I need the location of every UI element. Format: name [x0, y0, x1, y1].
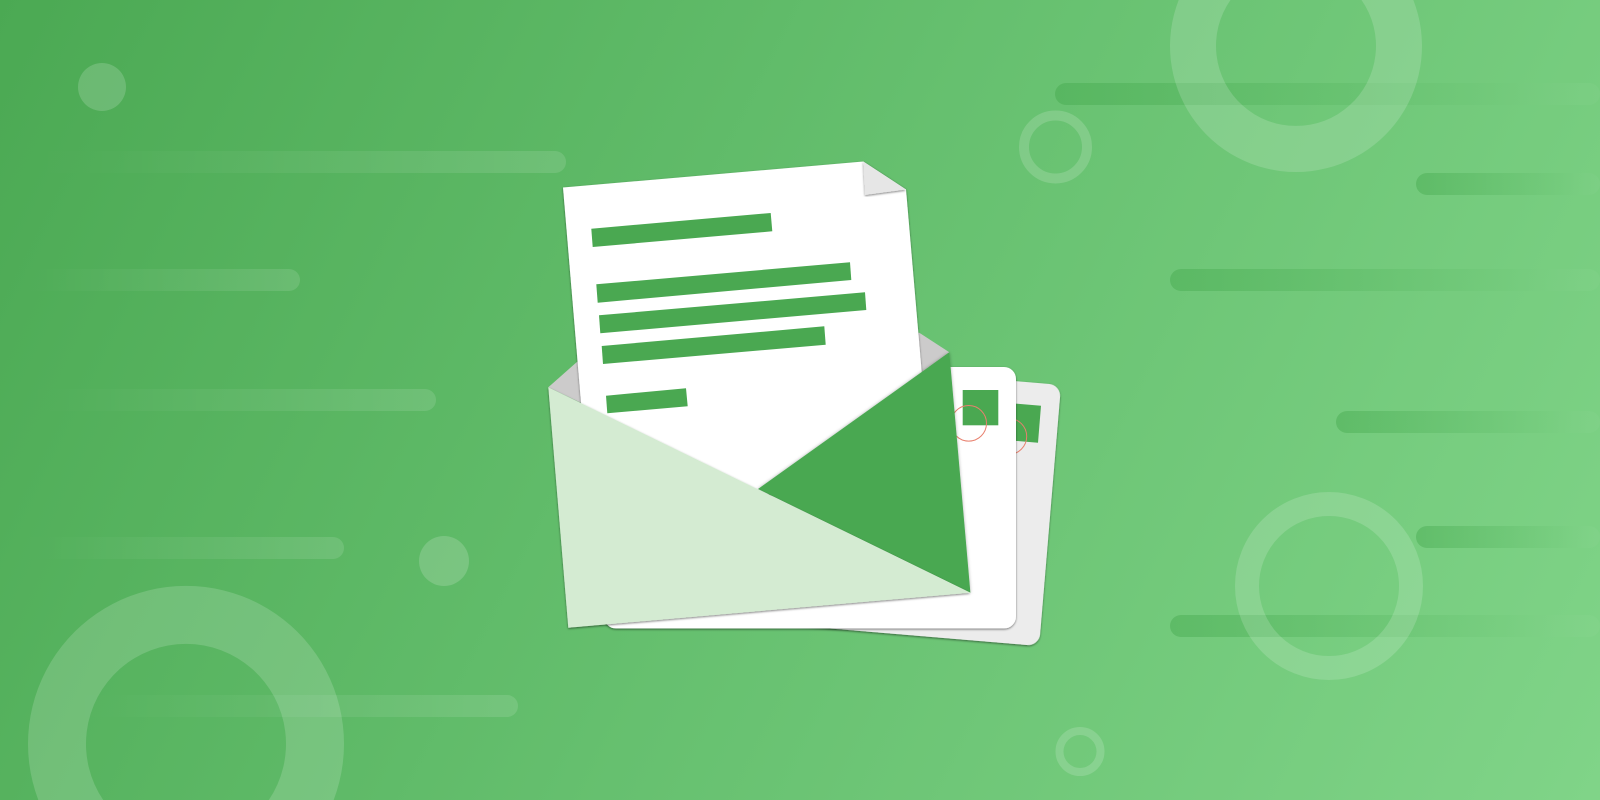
- postmark circle on front card: [951, 406, 986, 441]
- envelope back flap: [548, 333, 949, 489]
- letter text lines: [591, 213, 866, 413]
- illustration: envelope with letters: [548, 162, 1061, 646]
- letter sheet: [563, 162, 931, 510]
- envelope front flap (light green): [548, 387, 970, 628]
- envelope right flap (dark green): [758, 352, 970, 593]
- front card (white): [604, 367, 1016, 628]
- stamp on back card: [1002, 403, 1041, 443]
- folded corner: [863, 162, 906, 195]
- postmark circle on back card: [991, 418, 1027, 454]
- decorative dots: [78, 63, 469, 586]
- back card (grey, tilted): [628, 350, 1061, 646]
- stamp on front card: [963, 390, 998, 425]
- right decorative pills: [1055, 83, 1600, 637]
- left decorative pills: [0, 151, 566, 717]
